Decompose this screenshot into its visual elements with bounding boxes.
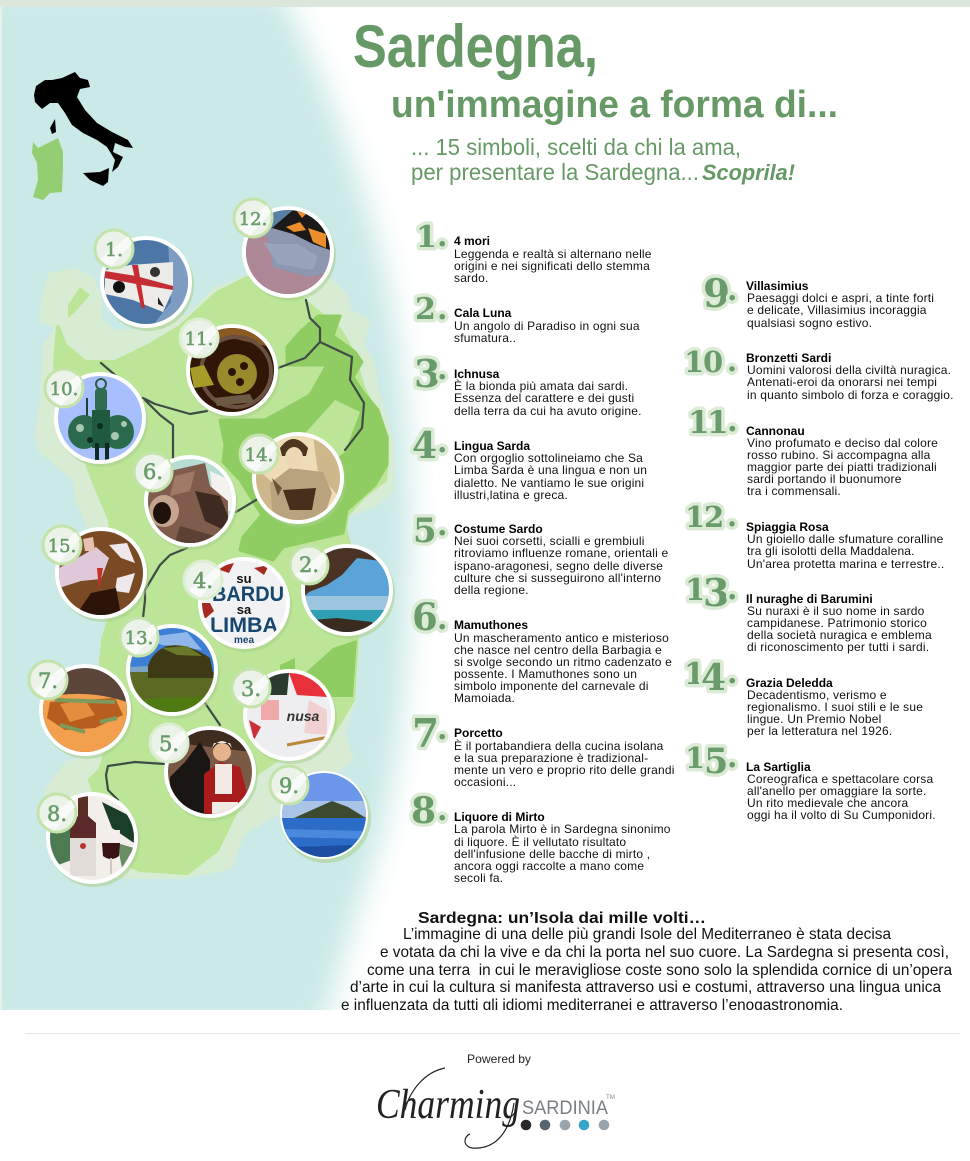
item 14 — [684, 656, 923, 738]
item 13: 1 — [685, 573, 706, 608]
bottom paragraph: d’arte in cui la cultura si manifesta attraverso usi e costumi, attraverso una lingua unica — [350, 979, 941, 996]
number badges: 15. — [48, 536, 76, 557]
item 5: 5 — [413, 511, 437, 551]
item 6: si svolge secondo un ritmo cadenzato e — [454, 655, 672, 669]
item 11: Cannonau — [746, 424, 805, 438]
item 6: possente. I Mamuthones sono un — [454, 667, 637, 681]
item 2: sfumatura.. — [454, 331, 516, 345]
item 15: Un rito medievale che ancora — [747, 796, 909, 810]
item 7: e la sua preparazione è tradizional- — [454, 751, 648, 765]
logo: Charming Sardinia: SARDINIA — [522, 1098, 608, 1119]
item 8: 8 — [411, 790, 436, 832]
photo circle 14: Grazia Deledda — [252, 432, 346, 527]
item 9: Paesaggi dolci e aspri, a tinte forti — [747, 291, 934, 305]
item 11: 1 — [707, 405, 729, 441]
item 7: 7 — [412, 711, 439, 757]
item 1: 1 — [416, 220, 437, 255]
item 7 — [412, 711, 675, 789]
item 8: ancora oggi raccolte a mano come — [454, 859, 644, 873]
item 3 — [414, 351, 642, 418]
item 12: Un'area protetta marina e terrestre.. — [747, 557, 944, 571]
item 13: Su nuraxi è il suo nome in sardo — [747, 604, 925, 618]
item 12: 2 — [704, 500, 724, 534]
item 12: . — [727, 499, 737, 533]
item 14: 4 — [701, 657, 726, 699]
item 11 — [688, 403, 938, 498]
photo circle 5: Costume Sardo — [164, 726, 258, 821]
bottom paragraph: come una terra in cui le meravigliose coste sono solo la splendida cornice di un’opera — [367, 962, 952, 979]
item 11: tra i commensali. — [747, 484, 841, 498]
item 5: Costume Sardo — [454, 522, 543, 536]
photo circle 4: Su Sardu sa Limba: sa — [237, 602, 252, 617]
map of Sardinia — [37, 265, 392, 877]
item 6: Mamoiada. — [454, 691, 515, 705]
item 1: sardo. — [454, 271, 488, 285]
item 8: secoli fa. — [454, 871, 503, 885]
item 7: Porcetto — [454, 726, 503, 740]
powered by: Powered by — [467, 1052, 531, 1066]
item 1: origini e nei significati dello stemma — [454, 259, 650, 273]
item 5: della regione. — [454, 583, 529, 597]
intro line 1: ... 15 simboli, scelti da chi la ama, — [411, 134, 741, 160]
item 10: in quanto simbolo di forza e coraggio. — [747, 388, 954, 402]
photo circle 4: Su Sardu sa Limba: LIMBA — [210, 614, 278, 637]
item 1 — [416, 219, 652, 285]
item 6: 6 — [412, 595, 438, 639]
item 11: maggior parte dei piatti tradizionali — [747, 460, 937, 474]
photo circle 3: Ichnusa: nusa — [287, 708, 320, 724]
top band — [0, 0, 970, 7]
item 4: Limba Sarda è una lingua e non un — [454, 463, 647, 477]
number badges: 9. — [279, 774, 299, 798]
bottom paragraph: e votata da chi la vive e da chi la porta nel suo cuore. La Sardegna si presenta così, — [380, 944, 949, 961]
item 3: Ichnusa — [454, 367, 500, 381]
logo: Charming Sardinia: Charming — [376, 1082, 520, 1128]
item 4: Con orgoglio sottolineiamo che Sa — [454, 451, 643, 465]
item 9: . — [727, 273, 737, 308]
photo circle 2: Cala Luna — [301, 544, 395, 639]
item 7: occasioni... — [454, 775, 516, 789]
item 5: ispano-aragonesi, segno delle diverse — [454, 559, 663, 573]
item 6: Un mascheramento antico e misterioso — [454, 631, 669, 645]
bottom paragraph: L’immagine di una delle più grandi Isole del Mediterraneo è stata decisa — [403, 926, 891, 943]
item 9: qualsiasi sogno estivo. — [747, 316, 872, 330]
item 14: lingue. Un Premio Nobel — [747, 712, 881, 726]
item 11: sardi portando il buonumore — [747, 472, 902, 486]
item 6: Mamuthones — [454, 618, 528, 632]
photo circle 3: Ichnusa — [243, 669, 337, 764]
item 2: Un angolo di Paradiso in ogni sua — [454, 319, 640, 333]
photo circle 6: Mamuthones — [144, 455, 238, 550]
intro line 2: per presentare la Sardegna... — [411, 159, 699, 185]
item 3: È la bionda più amata dai sardi. — [454, 378, 628, 393]
photo circle 1: flag — [100, 236, 194, 331]
item 15: 1 — [685, 741, 705, 775]
item 10: 0 — [703, 345, 723, 379]
photo circle 4: Su Sardu sa Limba: BARDU — [212, 583, 284, 606]
item 12: Un gioiello dalle sfumature coralline — [747, 532, 944, 546]
item 9: e delicate, Villasimius incoraggia — [747, 303, 927, 317]
logo: Charming Sardinia — [376, 1068, 615, 1148]
item 8: La parola Mirto è in Sardegna sinonimo — [454, 822, 671, 836]
number badges: 1. — [105, 239, 123, 261]
item 15: . — [727, 740, 737, 775]
item 12: 1 — [685, 500, 705, 534]
item 1: Leggenda e realtà si alternano nelle — [454, 247, 652, 261]
photo circle 8: Liquore di Mirto — [46, 792, 140, 887]
item 14: Grazia Deledda — [746, 676, 833, 690]
item 12: tra gli isolotti della Maddalena. — [747, 544, 915, 558]
item 13: Il nuraghe di Barumini — [746, 592, 873, 606]
item 12 — [685, 499, 944, 571]
item 7: . — [437, 712, 447, 747]
item 2 — [415, 292, 640, 345]
item 5: Nei suoi corsetti, scialli e grembiuli — [454, 534, 645, 548]
icon: map of Italy — [32, 72, 133, 200]
item 4 — [412, 425, 647, 502]
item 9: Villasimius — [746, 279, 809, 293]
number badges: 4. — [193, 569, 213, 593]
item 3: Essenza del carattere e dei gusti — [454, 391, 634, 405]
item 3: . — [437, 352, 447, 387]
item 13: di riconoscimento per tutti i sardi. — [747, 640, 929, 654]
item 6: simbolo imponente del carnevale di — [454, 679, 649, 693]
item 4: dialetto. Ne vantiamo le sue origini — [454, 476, 644, 490]
number badges: 8. — [47, 802, 67, 826]
photo circle 12: pink beach — [242, 206, 336, 301]
photo circle 9: Villasimius — [280, 771, 371, 863]
item 15: La Sartiglia — [746, 760, 811, 774]
sea background — [0, 0, 410, 1030]
item 2: Cala Luna — [454, 306, 512, 320]
item 8: dell'infusione delle bacche di mirto , — [454, 847, 650, 861]
item 11: rosso rubino. Si accompagna alla — [747, 448, 931, 462]
item 4: . — [437, 425, 447, 460]
intro line 2: Scoprila! — [702, 160, 795, 185]
photo circle 4: Su Sardu sa Limba — [198, 557, 292, 652]
title: Sardegna, — [353, 13, 598, 80]
photo circle 10: Bronzetti — [54, 372, 148, 467]
item 3: della terra da cui ha avuto origine. — [454, 404, 642, 418]
number badges: 13. — [125, 628, 153, 649]
item 5 — [413, 508, 669, 597]
number badges: 12. — [239, 209, 267, 230]
item 8: . — [437, 793, 447, 828]
subtitle: un'immagine a forma di... — [391, 84, 838, 126]
photo circle 4: Su Sardu sa Limba: mea — [234, 635, 254, 646]
item 9 — [703, 271, 934, 330]
item 6 — [412, 595, 672, 705]
item 3: 3 — [414, 351, 440, 396]
item 15: 5 — [704, 741, 728, 782]
item 10: Uomini valorosi della civiltà nuragica. — [747, 363, 951, 377]
bottom paragraph: Sardegna: un’Isola dai mille volti… — [418, 910, 706, 927]
item 15: oggi ha il volto di Su Cumponidori. — [747, 808, 936, 822]
item 9: 9 — [703, 271, 730, 317]
item 4: illustri,latina e greca. — [454, 488, 568, 502]
item 14: per la letteratura nel 1926. — [747, 724, 892, 738]
item 6: . — [437, 602, 447, 637]
item 8: Liquore di Mirto — [454, 810, 545, 824]
item 13: 3 — [703, 570, 729, 615]
item 2: . — [437, 292, 447, 327]
item 10: Antenati-eroi da onorarsi nei tempi — [747, 375, 937, 389]
number badges: 6. — [143, 460, 163, 484]
item 10 — [684, 344, 954, 402]
item 13: della società nuragica e emblema — [747, 628, 932, 642]
logo: Charming Sardinia: TM — [606, 1095, 615, 1101]
item 11: Vino profumato e deciso dal colore — [747, 436, 938, 450]
bottom paragraph — [341, 910, 952, 1014]
item 4: 4 — [412, 425, 437, 467]
number badges: 11. — [185, 329, 213, 350]
item 15: all'anello per omaggiare la sorte. — [747, 784, 927, 798]
photo circle 15: Sartiglia — [55, 527, 149, 622]
item 1: 4 mori — [454, 234, 490, 248]
item 12: Spiaggia Rosa — [746, 520, 829, 534]
item 8: di liquore. È il vellutato risultato — [454, 834, 626, 849]
item 8 — [411, 790, 671, 885]
item 14: Decadentismo, verismo e — [747, 688, 887, 702]
number badges: 2. — [299, 553, 319, 577]
item 10: 1 — [684, 345, 704, 379]
item 2: 2 — [415, 292, 436, 327]
item 7: mente un vero e proprio rito delle grandi — [454, 763, 675, 777]
item 1: . — [437, 219, 447, 254]
item 14: 1 — [684, 657, 705, 692]
item 5: culture che si susseguirono all'interno — [454, 571, 661, 585]
item 4: Lingua Sarda — [454, 439, 530, 453]
item 6: che nasce nel centro della Barbagia e — [454, 643, 662, 657]
number badges: 10. — [50, 379, 78, 400]
item 10: Bronzetti Sardi — [746, 351, 831, 365]
number badges — [29, 199, 328, 832]
item 13: campidanese. Patrimonio storico — [747, 616, 927, 630]
item 5: ritroviamo influenze romane, orientali e — [454, 546, 669, 560]
number badges: 7. — [38, 669, 58, 693]
photo circle 7: Porcetto — [39, 664, 133, 759]
item 11: . — [727, 403, 738, 439]
item 15 — [685, 740, 936, 822]
number badges: 14. — [245, 445, 273, 466]
bottom paragraph: e influenzata da tutti gli idiomi mediterranei e attraverso l’enogastronomia. — [341, 997, 843, 1014]
number badges: 5. — [159, 732, 179, 756]
item 13 — [685, 570, 932, 654]
item 14: . — [727, 656, 737, 691]
item 10: . — [727, 344, 737, 378]
photo circle 11: Cannonau — [186, 324, 280, 419]
photo circle 4: Su Sardu sa Limba: su — [236, 571, 252, 586]
number badges: 3. — [241, 677, 261, 701]
item 7: È il portabandiera della cucina isolana — [454, 738, 664, 753]
item 14: regionalismo. I suoi stili e le sue — [747, 700, 923, 714]
item 13: . — [727, 572, 737, 607]
item 15: Coreografica e spettacolare corsa — [747, 772, 933, 786]
item 5: . — [437, 508, 447, 543]
photo circle 13: Nuraghe — [126, 624, 220, 719]
item 11: 1 — [688, 405, 710, 441]
